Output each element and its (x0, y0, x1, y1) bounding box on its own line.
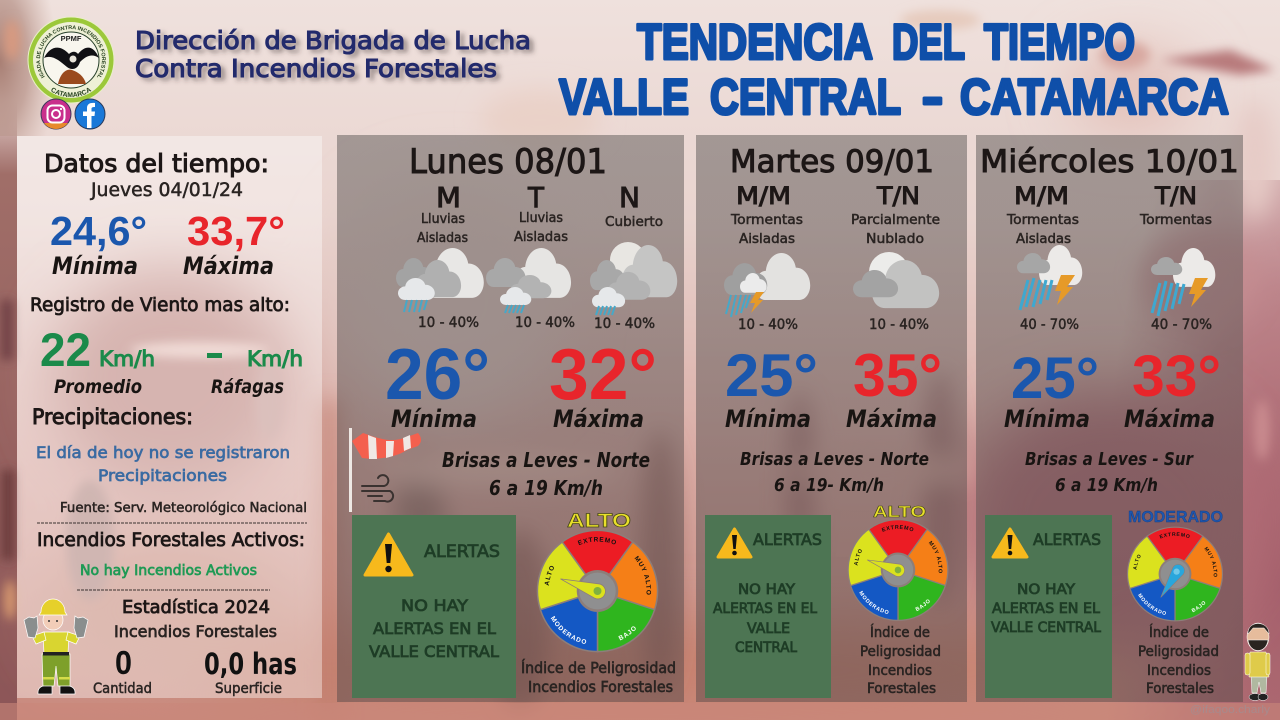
period: night: Cubierto (605, 215, 663, 230)
heading: day: Lunes 08/01 (409, 142, 607, 182)
fire danger label: MODERADO (1128, 509, 1223, 526)
fire danger gauge: BAJO (1191, 601, 1206, 612)
icon: storm (1151, 248, 1215, 316)
maximum temperature: 33,7° (187, 208, 285, 254)
period: morning: 40 - 70% (1020, 317, 1079, 333)
wind text: 6 a 19- Km/h (774, 475, 884, 496)
fire danger gauge: ALTO (1133, 554, 1140, 570)
wind text: Brisas a Leves - Norte (442, 448, 650, 472)
date: Jueves 04/01/24 (90, 179, 243, 201)
logo: brigade emblem (28, 16, 114, 104)
heading: institution name: Contra Incendios Forestales (135, 54, 497, 83)
wind gusts: Ráfagas (211, 376, 284, 398)
source: Fuente: Serv. Meteorológico Nacional (60, 501, 307, 516)
alert box: ALERTAS EN EL (713, 601, 817, 617)
alert box: ALERTAS (424, 542, 500, 562)
period: morning: Tormentas (1006, 213, 1079, 228)
fire danger label: ALTO (567, 511, 631, 532)
alert box: ALERTAS (753, 530, 822, 549)
temperature: minimum: Mínima (391, 405, 477, 433)
temperature: minimum: Mínima (725, 405, 811, 433)
watermark: @ifaqoo.charly (1190, 704, 1271, 716)
alert box: CENTRAL (735, 640, 797, 656)
wind text (740, 449, 929, 496)
alert box: NO HAY (1017, 582, 1075, 598)
icon: firefighter mascot (24, 599, 88, 694)
alert box: VALLE CENTRAL (369, 642, 499, 661)
fire danger gauge: EXTREMO (1159, 532, 1190, 538)
heading: day: Miércoles 10/01 (980, 144, 1239, 180)
gauge caption: Incendios Forestales (528, 678, 673, 696)
title: VALLE (559, 69, 689, 125)
period: morning: Aisladas (417, 231, 468, 246)
statistic: surface: Superficie (215, 681, 282, 697)
alert box: ALERTAS EN EL (992, 601, 1100, 617)
wind gusts: Km/h (247, 347, 303, 371)
fire danger gauge: MODERADO (859, 590, 888, 614)
gauge caption: Incendios (1147, 663, 1211, 679)
temperature: maximum: Máxima (1124, 405, 1215, 433)
precipitation note: El día de hoy no se registraron (36, 443, 290, 462)
heading: wind record: Registro de Viento mas alto: (30, 294, 290, 316)
icon: showers cloud (486, 248, 571, 313)
period: morning: Lluvias (421, 212, 465, 227)
period: afternoon: Aisladas (514, 230, 568, 245)
wind average: 22 (40, 323, 91, 376)
title (559, 14, 1229, 125)
logo: brigade emblem: PPMF (61, 34, 82, 43)
wind text (442, 448, 650, 500)
precipitation note: Precipitaciones (98, 466, 227, 485)
heading: day: Martes 09/01 (730, 144, 934, 180)
icon: isolated storm (724, 253, 810, 317)
period: night (851, 182, 940, 333)
title: TENDENCIA (637, 14, 873, 70)
fire danger label: ALTO (873, 504, 926, 521)
temperature: minimum: Mínima (1004, 405, 1090, 433)
maximum temperature: Máxima (183, 252, 274, 280)
title: TIEMPO (984, 14, 1135, 70)
wind text: Brisas a Leves - Sur (1025, 449, 1194, 470)
header: logo and institution name (28, 16, 536, 130)
temperature: minimum: 25° (1011, 346, 1099, 411)
period: morning: M/M (1014, 182, 1069, 210)
temperature: maximum (846, 342, 942, 433)
statistic: surface: 0,0 has (204, 647, 297, 681)
fire danger gauge: MUY ALTO (1204, 546, 1218, 577)
heading: institution name (135, 26, 531, 83)
alert box: NO HAY (738, 582, 795, 598)
alert box: VALLE CENTRAL (991, 620, 1101, 636)
wind average: Km/h (99, 347, 155, 371)
gauge caption: Peligrosidad (860, 644, 941, 660)
period: afternoon: 10 - 40% (515, 315, 575, 331)
fire danger gauge: MODERADO (1138, 593, 1166, 615)
period: night: 40 - 70% (1151, 317, 1212, 333)
temperature: maximum: 33° (1132, 344, 1221, 409)
gauge caption: Forestales (1146, 681, 1214, 697)
period: morning: 10 - 40% (738, 317, 798, 333)
title: DEL (892, 14, 965, 70)
icon: overcast night (590, 242, 677, 315)
wind gusts (207, 347, 303, 398)
title: CENTRAL (710, 69, 901, 125)
fire danger gauge (536, 530, 658, 652)
alert box (985, 515, 1112, 698)
heading: precipitaciones: Precipitaciones: (32, 405, 193, 429)
alert box: ALERTAS (1033, 530, 1101, 549)
period: night: 10 - 40% (869, 317, 929, 333)
alert box (705, 515, 831, 698)
fire danger gauge (1127, 526, 1223, 622)
icon: warning triangle (365, 534, 412, 575)
period: morning (396, 181, 484, 331)
statistic: quantity (93, 644, 152, 697)
icon: facebook (75, 99, 105, 129)
fire danger gauge: ALTO (544, 566, 554, 586)
statistic: quantity: 0 (115, 644, 132, 681)
icon: windsock (349, 428, 421, 512)
temperature: maximum: Máxima (846, 405, 937, 433)
active fires status: No hay Incendios Activos (80, 563, 257, 579)
temperature: maximum: Máxima (553, 405, 644, 433)
panel: miércoles 10/01 (976, 135, 1243, 702)
period: night: Nublado (866, 232, 924, 247)
wind text: 6 a 19 Km/h (489, 476, 603, 500)
minimum temperature (50, 208, 147, 280)
fire danger gauge: BAJO (618, 626, 636, 640)
fire danger gauge: MUY ALTO (928, 540, 942, 573)
period: night: T/N (876, 182, 920, 210)
period: morning: Aisladas (739, 232, 795, 247)
statistic: quantity: Cantidad (93, 681, 152, 697)
statistic: surface (204, 647, 297, 697)
gauge caption: Incendios (868, 663, 932, 679)
period: night: N (619, 181, 640, 214)
heading: active fires: Incendios Forestales Activos: (37, 529, 305, 551)
panel: lunes 08/01 (337, 135, 684, 702)
gauge caption (860, 624, 941, 697)
icon: storm (1017, 245, 1082, 310)
period: morning (1006, 182, 1082, 333)
gauge caption: Índice de (870, 624, 930, 641)
gauge caption: Peligrosidad (1138, 644, 1219, 660)
heading: statistics: Estadística 2024 (122, 597, 270, 618)
period: morning: 10 - 40% (418, 315, 479, 331)
heading: datos del tiempo: Datos del tiempo: (44, 149, 269, 178)
temperature: minimum: 25° (725, 342, 818, 409)
period: morning: Tormentas (730, 213, 803, 228)
gauge caption: Forestales (867, 681, 936, 697)
alert box: VALLE (747, 621, 790, 637)
logo: brigade emblem: CATAMARCA (51, 88, 92, 98)
gauge caption: Índice de Peligrosidad (521, 658, 676, 677)
gauge caption: Índice de (1149, 624, 1209, 641)
period: afternoon: Lluvias (519, 211, 563, 226)
period: night: Parcialmente (851, 213, 940, 228)
panel: martes 09/01 (696, 135, 967, 702)
period: morning: Aisladas (1016, 232, 1071, 247)
icon: warning triangle (993, 529, 1027, 557)
heading: institution name: Dirección de Brigada de Lucha (135, 26, 531, 55)
temperature: maximum: 32° (549, 335, 657, 415)
period: night (590, 181, 677, 332)
alert box (352, 515, 516, 698)
title: CATAMARCA (960, 69, 1229, 125)
icon: wind (362, 475, 393, 502)
icon: instagram (41, 99, 71, 129)
icon: partly cloudy night (853, 252, 939, 308)
fire danger gauge: EXTREMO (882, 525, 914, 532)
icon: warning triangle (718, 529, 751, 557)
wind text: Brisas a Leves - Norte (740, 449, 929, 470)
minimum temperature: Mínima (52, 252, 138, 280)
period: night: T/N (1154, 182, 1197, 210)
title: - (922, 69, 943, 125)
alert box: NO HAY (401, 596, 468, 615)
gauge caption (521, 658, 676, 696)
fire danger gauge (848, 519, 948, 621)
period: afternoon: T (527, 181, 545, 214)
fire danger gauge: MUY ALTO (634, 556, 652, 595)
minimum temperature: 24,6° (50, 208, 147, 254)
wind average (40, 323, 155, 398)
fire danger gauge: MODERADO (550, 616, 586, 644)
temperature: minimum (1004, 346, 1099, 433)
period: morning: M (436, 181, 461, 214)
wind average: Promedio (54, 376, 142, 398)
panel: datos del tiempo (17, 136, 322, 698)
temperature: maximum (1124, 344, 1221, 433)
period: night: 10 - 40% (594, 316, 655, 332)
wind text: 6 a 19 Km/h (1055, 475, 1158, 496)
fire danger gauge: EXTREMO (578, 537, 616, 546)
precipitation note (36, 443, 290, 485)
period: morning (724, 182, 810, 333)
period: night: Tormentas (1139, 213, 1212, 228)
gauge caption (1138, 624, 1219, 697)
icon: bearded character (1245, 623, 1270, 700)
wind text (1025, 449, 1194, 496)
period: night (1139, 182, 1215, 333)
temperature: minimum: 26° (385, 335, 490, 415)
icon: showers cloud (396, 248, 484, 312)
temperature: maximum: 35° (853, 342, 942, 409)
alert box: ALERTAS EN EL (373, 619, 496, 638)
maximum temperature (183, 208, 285, 280)
fire danger gauge: ALTO (854, 549, 862, 566)
panel: datos del tiempo: Incendios Forestales (114, 622, 277, 641)
period: afternoon (486, 181, 575, 331)
period: morning: M/M (736, 182, 791, 210)
fire danger gauge: BAJO (915, 600, 930, 612)
